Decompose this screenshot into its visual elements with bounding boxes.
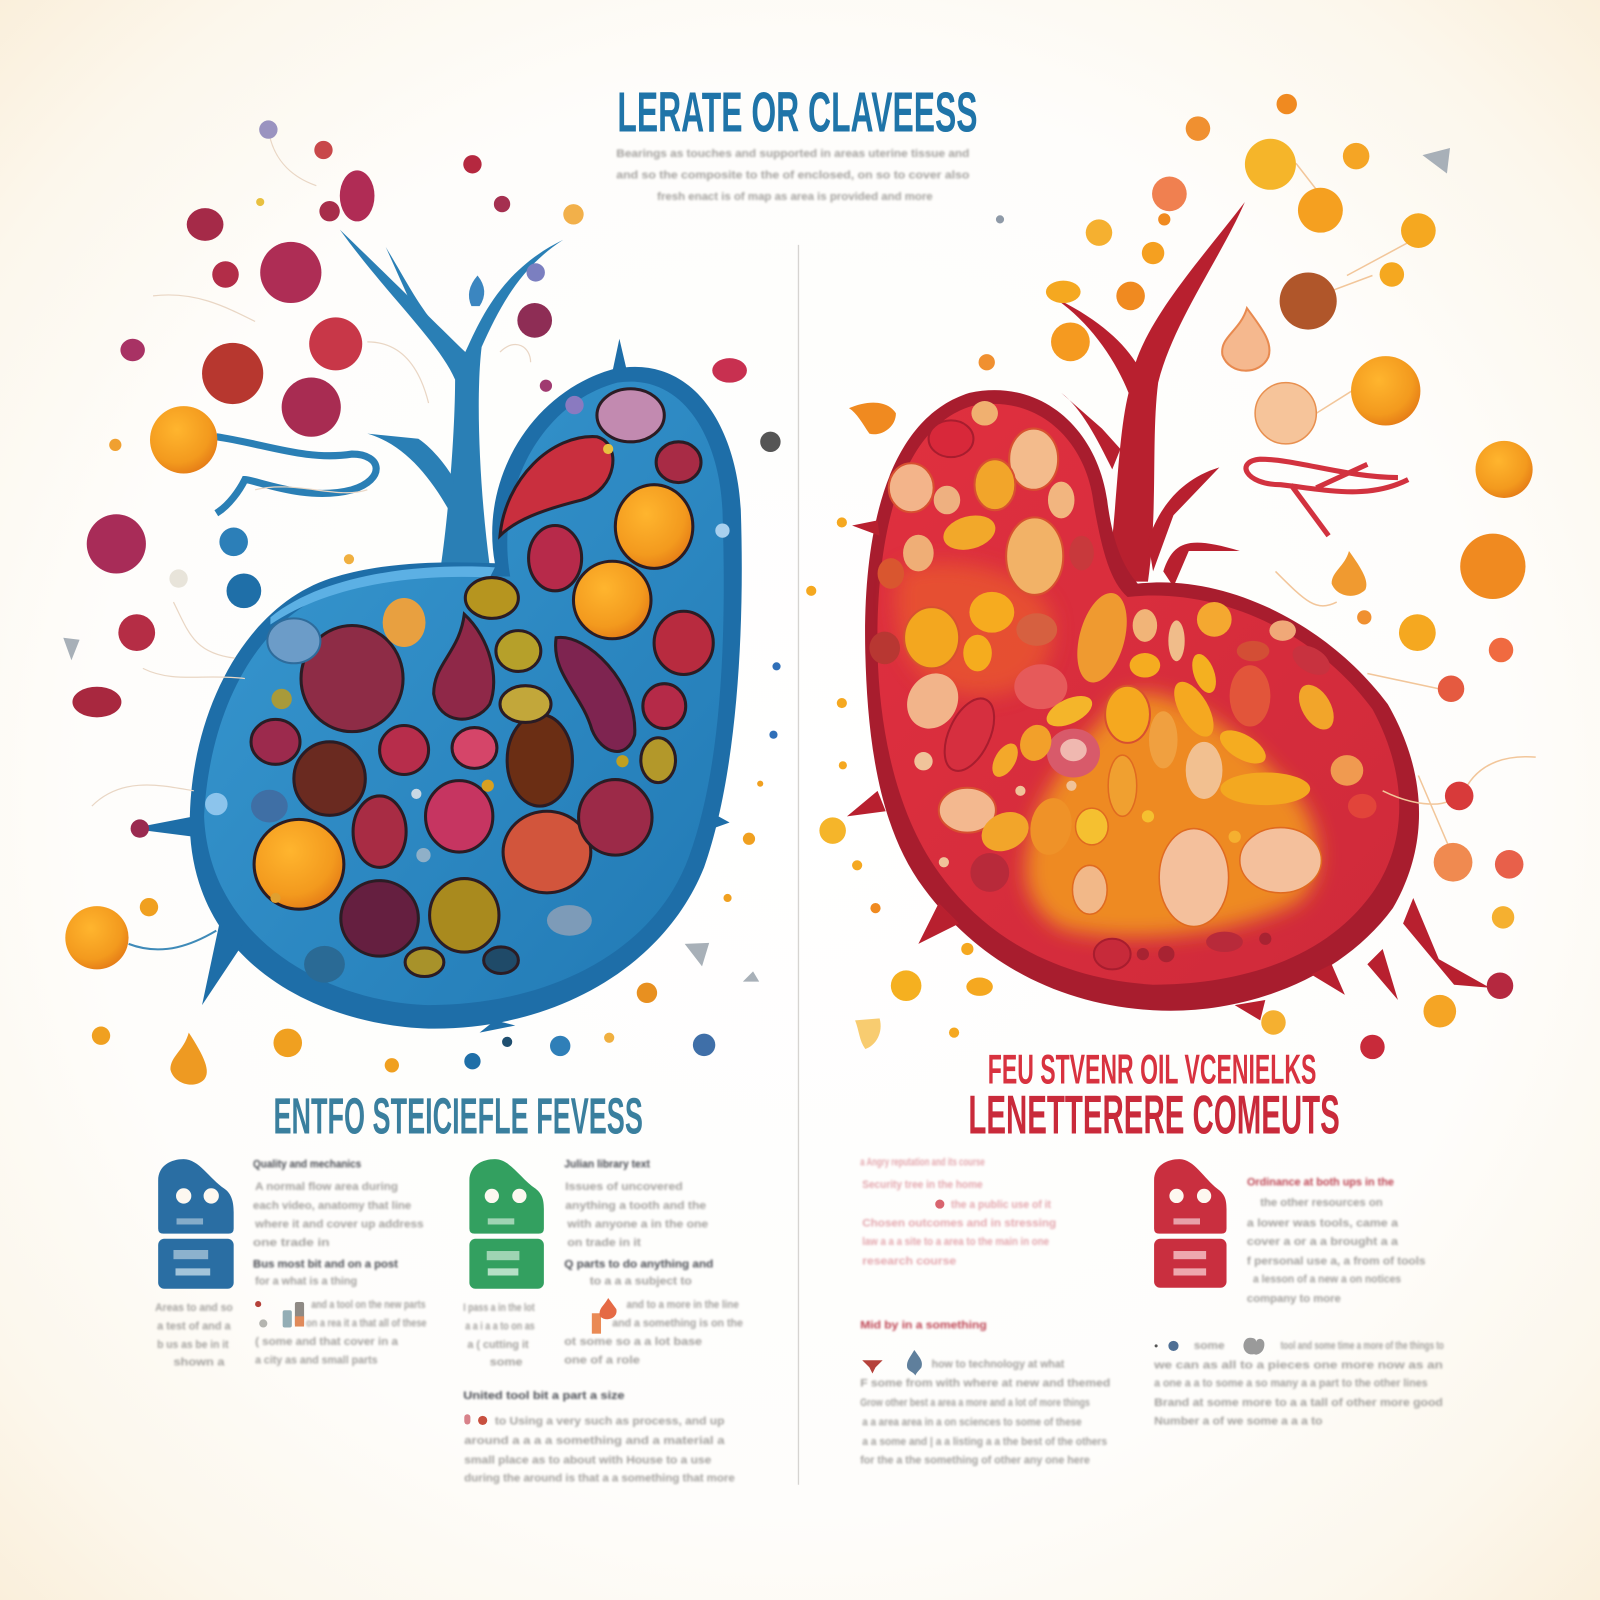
icon: green badge: [469, 1159, 544, 1289]
right column text: company to more: [1247, 1293, 1341, 1305]
left section heading: ENTFO STEICIEFLE FEVESS: [273, 1088, 643, 1145]
left column one text: each video, anatomy that line: [253, 1200, 411, 1212]
red organ cells: [869, 401, 1377, 969]
right column text: Grow other best a area a more and a lot of more things: [860, 1397, 1090, 1409]
left column one text: a test of and a: [157, 1321, 232, 1333]
icon: small markers left column two: [464, 1298, 617, 1425]
left column one text: a city as and small parts: [255, 1354, 378, 1366]
left column two text: one of a role: [564, 1354, 640, 1366]
red organ spikes: [847, 520, 1490, 1020]
red ribbon loop: [1246, 459, 1408, 536]
right column text: [860, 1156, 1444, 1466]
left column two text: [463, 1158, 743, 1485]
left column two text: and to a more in the line: [627, 1299, 739, 1311]
right column text: the other resources on: [1260, 1197, 1383, 1209]
left column two text: United tool bit a part a size: [463, 1390, 625, 1402]
left column two text: I pass a in the lot: [463, 1302, 535, 1314]
left column two text: and a something is on the: [612, 1318, 743, 1330]
blue organ spikes: [131, 339, 730, 1033]
icon: small red and blue markers: [862, 1199, 1264, 1376]
intro text: and so the composite to the of enclosed, on so to cover also: [616, 170, 970, 182]
right column text: we can as all to a pieces one more now as an: [1153, 1359, 1443, 1371]
blue vessel tree: [340, 230, 563, 566]
intro text: Bearings as touches and supported in areas uterine tissue and: [616, 148, 969, 160]
left column two text: ot some so a a lot base: [564, 1336, 702, 1348]
right column text: the a public use of it: [951, 1199, 1051, 1211]
right column text: for the a the something of other any one here: [860, 1454, 1090, 1466]
right column text: Mid by in a something: [860, 1320, 987, 1332]
left column one text: Quality and mechanics: [253, 1158, 361, 1170]
left column one text: and a tool on the new parts: [311, 1299, 426, 1311]
centre divider: [797, 245, 799, 1485]
right column text: a lesson of a new a on notices: [1253, 1274, 1401, 1286]
red vessel tree: [1051, 202, 1245, 587]
left column two text: around a a a a something and a material a: [464, 1435, 726, 1447]
left column two text: a ( cutting it: [467, 1339, 529, 1351]
left column one text: ( some and that cover in a: [255, 1336, 399, 1348]
left column two text: small place as to about with House to a use: [464, 1454, 711, 1466]
right column text: a a some and | a a listing a a the best of the others: [862, 1436, 1107, 1448]
blue organ translucent cells: [205, 380, 730, 983]
right section heading: [968, 1046, 1340, 1146]
right column text: research course: [862, 1255, 956, 1267]
right column text: some: [1194, 1340, 1225, 1352]
left column one text: [155, 1158, 427, 1368]
left column one text: shown a: [173, 1356, 226, 1368]
right column text: law a a a site to a area to the main in one: [862, 1236, 1049, 1248]
left column one text: on a rea it a that all of these: [306, 1318, 427, 1330]
left column one text: where it and cover up address: [254, 1219, 424, 1231]
right column text: Number a of we some a a a to: [1154, 1415, 1323, 1427]
icon: blue badge: [158, 1159, 234, 1289]
red organ illustration: [847, 202, 1490, 1020]
right column text: Chosen outcomes and in stressing: [862, 1218, 1056, 1230]
right column text: cover a or a a brought a a: [1247, 1236, 1399, 1248]
right column text: Security tree in the home: [862, 1179, 983, 1191]
blue organ illustration: [131, 230, 742, 1033]
left column one text: A normal flow area during: [255, 1181, 398, 1193]
left column two text: anything a tooth and the: [565, 1200, 706, 1212]
blue organ cells: [251, 389, 713, 977]
right column text: a a area area in a on sciences to some of these: [862, 1417, 1082, 1429]
left column two text: Julian library text: [564, 1158, 650, 1170]
left column two text: Issues of uncovered: [565, 1181, 683, 1193]
right column text: a Angry reputation and its course: [860, 1156, 985, 1168]
right column text: F some from with where at new and themed: [860, 1378, 1110, 1390]
left column two text: on trade in it: [567, 1237, 641, 1249]
red organ orange core: [1026, 693, 1317, 937]
right column text: how to technology at what: [932, 1358, 1065, 1370]
left column one text: b us as be in it: [157, 1339, 229, 1351]
right floating cells: [806, 94, 1536, 1059]
blue ribbon loop: [216, 437, 376, 513]
left column two text: to Using a very such as process, and up: [495, 1415, 725, 1427]
left column two text: a a i a a to on as: [465, 1321, 535, 1333]
right section heading: FEU STVENR OIL VCENIELKS: [988, 1046, 1316, 1093]
left column one text: one trade in: [253, 1237, 330, 1249]
icon: small bars left: [255, 1301, 304, 1328]
left column two text: to a a a subject to: [590, 1276, 692, 1288]
right column text: a one a a to some a so many a a part to the other lines: [1154, 1378, 1428, 1390]
right column text: Brand at some more to a a tall of other more good: [1154, 1397, 1443, 1409]
title: LERATE OR CLAVEESS: [617, 81, 978, 144]
left column one text: for a what is a thing: [255, 1276, 357, 1288]
right column text: tool and some time a more of the things to: [1281, 1340, 1444, 1352]
left column two text: with anyone a in the one: [566, 1219, 708, 1231]
left column one text: Areas to and so: [155, 1302, 233, 1314]
right column text: a lower was tools, came a: [1247, 1218, 1399, 1230]
intro text: fresh enact is of map as area is provided and more: [657, 191, 933, 203]
left column one text: Bus most bit and on a post: [253, 1258, 398, 1270]
blue organ body: [190, 367, 742, 1029]
left column two text: during the around is that a a something that more: [464, 1473, 735, 1485]
left column two text: Q parts to do anything and: [564, 1258, 713, 1270]
left floating cells: [63, 120, 781, 1085]
left column two text: some: [490, 1356, 522, 1368]
right column text: f personal use a, a from of tools: [1247, 1255, 1426, 1267]
intro text: [616, 148, 970, 203]
icon: red badge: [1154, 1159, 1227, 1288]
right column text: Ordinance at both ups in the: [1247, 1177, 1394, 1189]
red organ body: [865, 390, 1419, 1011]
